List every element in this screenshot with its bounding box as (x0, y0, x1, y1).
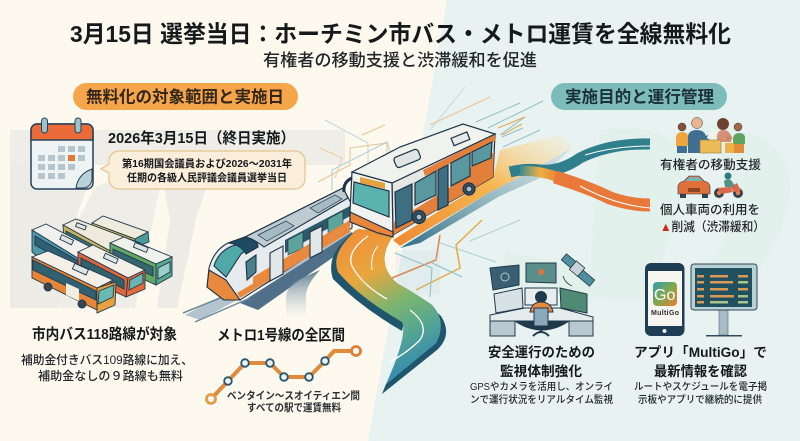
text: metro fare description: ベンタイン～スオイティエン間 (227, 390, 360, 402)
orange bus (32, 251, 116, 313)
ribbons to purposes (510, 144, 650, 208)
road streak behind bus (393, 135, 573, 248)
olive articulated bus (63, 219, 140, 264)
icon: digital signboard (691, 264, 757, 336)
metro viaduct (183, 228, 352, 322)
bus fleet illustration (32, 216, 172, 313)
green bus (110, 237, 172, 285)
text: MultiGo app: 示板やアプリで継続的に提供 (638, 393, 762, 406)
callout: election description: 第16期国会議員および2026～2031年 (122, 157, 292, 170)
text: city bus routes: 補助金なしの９路線も無料 (38, 368, 183, 383)
purpose text: reduce private vehicles: 個人車両の利用を (660, 202, 760, 217)
road ribbon (331, 229, 446, 394)
icon: car (678, 176, 710, 198)
icon: motorcycle (714, 172, 743, 198)
metro train (207, 188, 352, 300)
teal bus (32, 224, 104, 278)
icon: MultiGo phone: MultiGo (651, 310, 679, 317)
text: city bus routes: 補助金付きバス109路線に加え、 (21, 352, 193, 367)
text: safety monitoring: 安全運行のための (488, 344, 595, 360)
icon: monitoring room (490, 263, 593, 336)
callout: election description: 任期の各級人民評議会議員選挙当日 (127, 171, 287, 184)
icon: MultiGo phone (645, 263, 684, 336)
panel heading: purpose and operation: 実施目的と運行管理 (565, 86, 715, 106)
icon: voters at ballot box (676, 118, 745, 153)
date text: 2026年3月15日（終日実施） (108, 129, 295, 147)
icon: calendar (31, 118, 93, 189)
subtitle: 有権者の移動支援と渋滞緩和を促進 (263, 51, 537, 70)
text: city bus routes (21, 325, 193, 383)
icon: MultiGo phone: Go (654, 287, 675, 304)
yellow bus (92, 216, 149, 247)
text: city bus routes: 市内バス118路線が対象 (32, 325, 177, 343)
panel heading: coverage and date: 無料化の対象範囲と実施日 (86, 86, 284, 106)
purpose text: voter mobility: 有権者の移動支援 (660, 157, 761, 172)
text: safety monitoring: GPSやカメラを活用し、オンライ (470, 380, 613, 393)
text: metro line heading: メトロ1号線の全区間 (217, 326, 345, 344)
purpose text: reduce private vehicles: ▲削減（渋滞緩和） (660, 219, 765, 234)
metro line diagram (206, 346, 360, 404)
text: MultiGo app: ルートやスケジュールを電子掲 (634, 380, 767, 393)
panel heading: purpose and operation (551, 83, 727, 110)
transit map lines (318, 87, 543, 297)
text: MultiGo app: 最新情報を確認 (654, 363, 747, 379)
callout: election description (101, 151, 305, 189)
purpose text: reduce private vehicles (660, 202, 765, 234)
text: MultiGo app: アプリ「MultiGo」で (634, 345, 767, 360)
panel heading: coverage and date (73, 83, 298, 110)
text: safety monitoring: 監視体制強化 (500, 363, 583, 379)
red bus (78, 245, 145, 297)
icon: satellite (561, 254, 595, 286)
text: safety monitoring (470, 344, 613, 406)
text: metro fare description (227, 390, 360, 414)
main bus (344, 124, 495, 237)
text: metro fare description: すべての駅で運賃無料 (247, 401, 341, 414)
text: safety monitoring: ンで運行状況をリアルタイム監視 (470, 393, 613, 406)
title: 3月15日 選挙当日：ホーチミン市バス・メトロ運賃を全線無料化 (70, 21, 731, 47)
text: MultiGo app (634, 345, 767, 406)
